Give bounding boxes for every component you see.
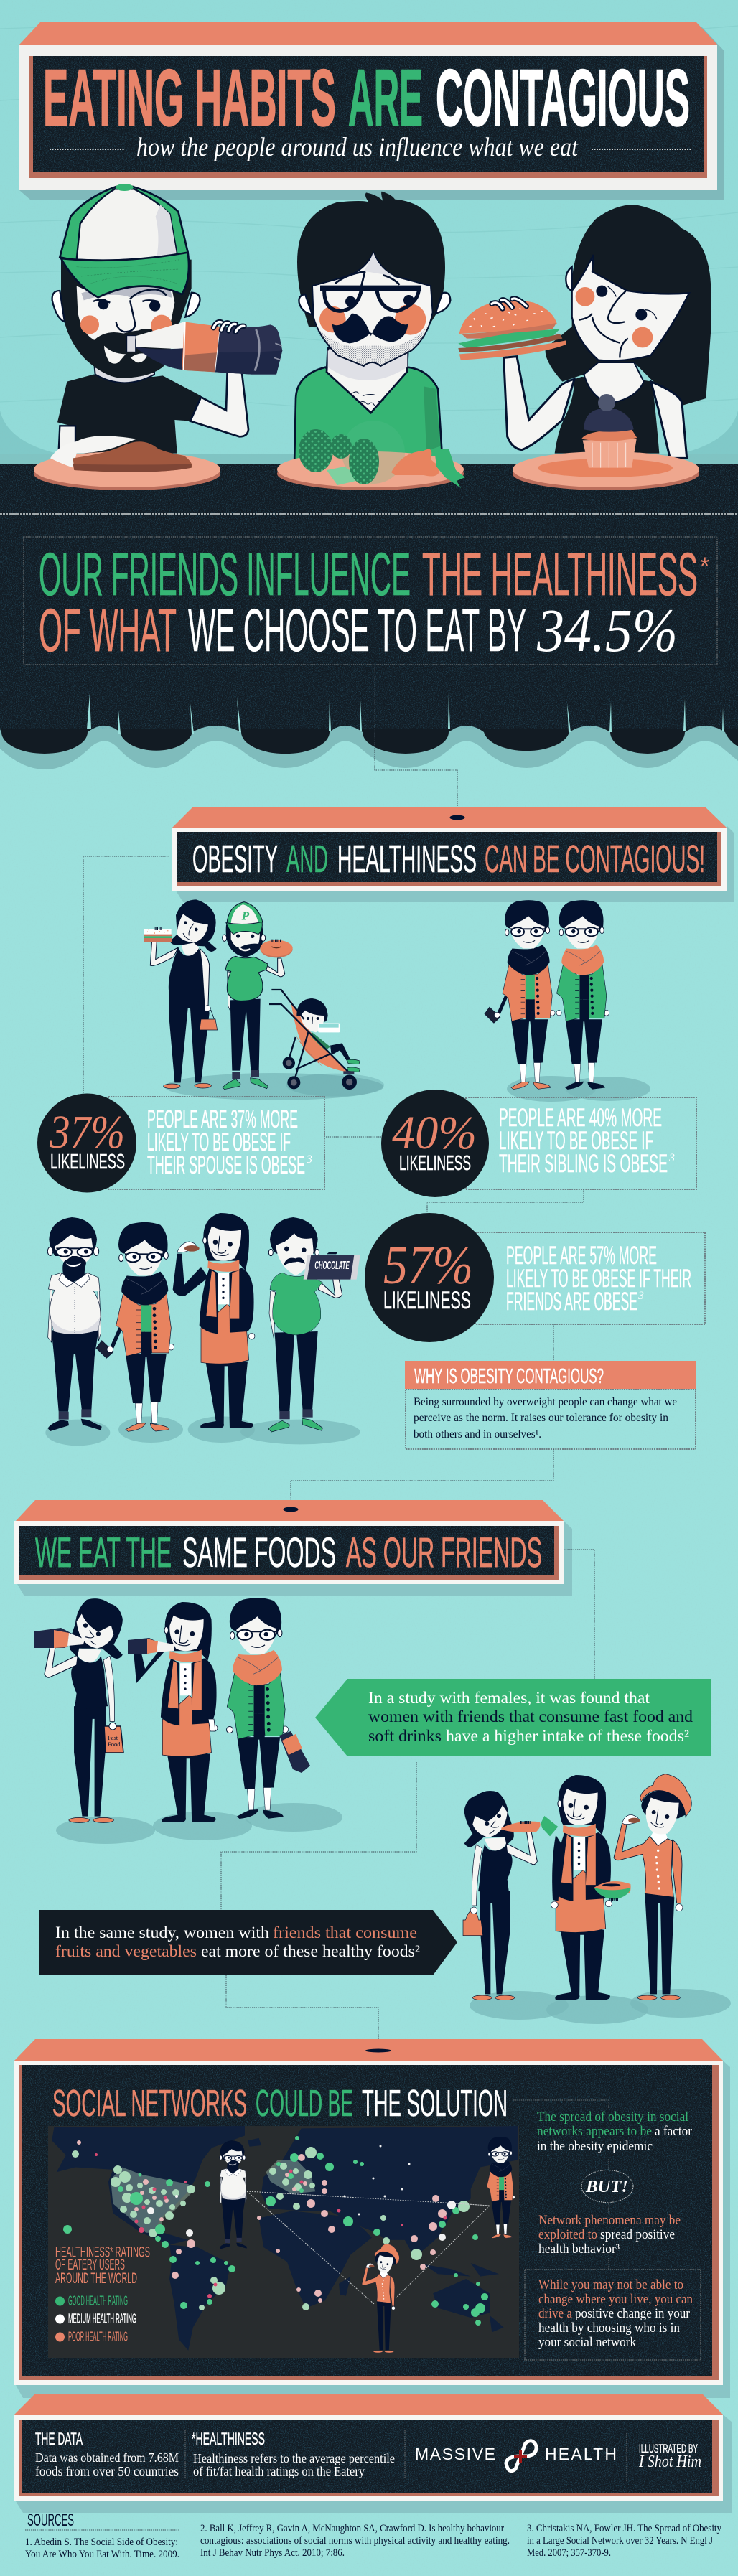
section header: we eat the same foods: WE EAT THE bbox=[35, 1530, 172, 1576]
map legend: POOR HEALTH RATING bbox=[68, 2330, 128, 2344]
social callout box: change where you live, you can bbox=[538, 2292, 693, 2307]
headline panel: friends influence: 34.5% bbox=[536, 596, 678, 665]
callout: dark study bbox=[39, 1910, 457, 1975]
sources: SOURCES bbox=[27, 2511, 74, 2530]
connector to social panel bbox=[226, 1975, 378, 2051]
the data: THE DATA bbox=[35, 2430, 83, 2449]
callout: green study: women with friends that consume fast food and bbox=[368, 1708, 693, 1725]
panel heading: COULD BE bbox=[256, 2083, 353, 2125]
plate: broccoli and carrots bbox=[277, 421, 465, 490]
stat: 57 percent: LIKELINESS bbox=[383, 1287, 471, 1314]
stat: 57 percent: 57% bbox=[383, 1235, 473, 1296]
illustration: women with carrot, papaya and cookie bbox=[463, 1774, 731, 2024]
stat: 40 percent: 3 bbox=[668, 1152, 675, 1164]
callout: green study: In a study with females, it was found that bbox=[368, 1689, 650, 1707]
chocolate bar: CHOCOLATE bbox=[314, 1260, 350, 1272]
map person: bearded man bbox=[220, 2140, 247, 2249]
map legend: OF EATERY USERS bbox=[55, 2257, 125, 2273]
social side text and connectors: networks appears to be bbox=[537, 2124, 652, 2139]
sources: Med. 2007; 357-370-9. bbox=[527, 2547, 611, 2559]
callout: green study bbox=[315, 1679, 711, 1756]
plate: steak and potatoes bbox=[34, 436, 220, 490]
connector to 37 percent bbox=[83, 856, 169, 1093]
the data: foods from over 50 countries bbox=[35, 2464, 179, 2478]
illustrator credit: ILLUSTRATED BY bbox=[639, 2442, 698, 2455]
footer panel bbox=[14, 2394, 732, 2513]
illustration: siblings bbox=[485, 900, 650, 1102]
soda bottle bbox=[127, 322, 282, 375]
father bbox=[223, 902, 293, 1090]
connector to 57 percent bbox=[427, 1189, 584, 1213]
social side text and connectors bbox=[513, 2100, 693, 2270]
healthiness definition: *HEALTHINESS bbox=[192, 2430, 265, 2449]
woman with carrot bbox=[463, 1791, 558, 2000]
panel: why is obesity contagious: both others and in ourselves¹. bbox=[414, 1428, 541, 1441]
map legend bbox=[55, 2244, 150, 2344]
father: P bbox=[241, 909, 250, 923]
illustration: family with stroller bbox=[144, 899, 384, 1100]
the data bbox=[35, 2430, 179, 2478]
social callout box bbox=[525, 2270, 701, 2360]
social side text and connectors: spread positive bbox=[600, 2227, 675, 2242]
panel heading: SOCIAL NETWORKS bbox=[52, 2083, 247, 2125]
stat: 40 percent: LIKELINESS bbox=[399, 1152, 471, 1175]
papaya bbox=[594, 1881, 631, 1900]
sources: Int J Behav Nutr Phys Act. 2010; 7:86. bbox=[200, 2547, 345, 2559]
healthiness definition: of fit/fat health ratings on the Eatery bbox=[193, 2464, 365, 2478]
callout: dark study: eat more of these healthy foods² bbox=[201, 1942, 420, 1960]
map person: woman bbox=[487, 2137, 515, 2238]
stat: 37 percent: LIKELINESS bbox=[50, 1151, 125, 1174]
connector to obesity header bbox=[375, 665, 457, 818]
section header: obesity and healthiness: AND bbox=[286, 838, 328, 881]
woman three with soda bbox=[227, 1598, 310, 1819]
the data: Data was obtained from 7.68M bbox=[35, 2450, 179, 2465]
panel: why is obesity contagious: WHY IS OBESITY CONTAGIOUS? bbox=[414, 1365, 604, 1388]
stat: 40 percent bbox=[381, 1090, 696, 1197]
header: eating habits are contagious bbox=[19, 22, 724, 200]
stat: 37 percent: PEOPLE ARE 37% MORE bbox=[147, 1105, 298, 1133]
connector to dark callout bbox=[221, 1762, 416, 1910]
stat: 37 percent bbox=[37, 1094, 324, 1193]
illustration: man drinking soda bbox=[52, 184, 282, 454]
plate: cupcake bbox=[513, 394, 699, 490]
illustration: four friends bbox=[45, 1213, 360, 1446]
headline panel: friends influence: OF WHAT bbox=[39, 596, 177, 664]
mother bbox=[144, 899, 218, 1089]
connector to why box bbox=[553, 1324, 554, 1361]
connector to same foods header bbox=[291, 1449, 554, 1509]
social callout box: health by choosing who is in bbox=[538, 2320, 680, 2336]
woman one with soda and fast food bag: Fast bbox=[108, 1734, 118, 1741]
stat: 37 percent: THEIR SPOUSE IS OBESE bbox=[147, 1151, 305, 1179]
sources: in a Large Social Network over 32 Years. N Engl J bbox=[527, 2535, 713, 2547]
illustrator credit: I Shot Him bbox=[638, 2453, 701, 2471]
stat: 37 percent: 37% bbox=[49, 1106, 125, 1158]
illustration: man with glasses and moustache bbox=[294, 192, 450, 465]
social side text and connectors: Network phenomena may be bbox=[538, 2213, 681, 2228]
callout: dark study: friends that consume bbox=[273, 1924, 417, 1942]
sources: You Are Who You Eat With. Time. 2009. bbox=[25, 2549, 179, 2560]
title: EATING HABITS bbox=[43, 53, 336, 143]
panel: why is obesity contagious: perceive as the norm. It raises our tolerance for obesity in bbox=[414, 1412, 668, 1424]
callout: green study: soft drinks bbox=[368, 1727, 442, 1745]
callout: dark study: In the same study, women with bbox=[55, 1924, 270, 1942]
section header: we eat the same foods: AS OUR FRIENDS bbox=[346, 1530, 542, 1576]
panel: social networks could be the solution bbox=[14, 2039, 730, 2398]
social side text and connectors: a factor bbox=[655, 2124, 693, 2139]
social side text and connectors: health behavior³ bbox=[538, 2242, 620, 2257]
massive health logo: MASSIVE bbox=[415, 2445, 495, 2463]
healthiness definition bbox=[192, 2430, 395, 2478]
illustrator credit bbox=[638, 2442, 701, 2471]
massive health logo bbox=[415, 2441, 617, 2471]
illustration: women with soda and fast food bbox=[34, 1598, 342, 1844]
table bbox=[0, 464, 738, 769]
social callout box: positive change in your bbox=[575, 2306, 691, 2321]
sources bbox=[25, 2511, 722, 2560]
map legend: AROUND THE WORLD bbox=[55, 2270, 137, 2287]
title: ARE bbox=[348, 53, 423, 143]
stat: 57 percent: 3 bbox=[637, 1290, 644, 1302]
map legend: HEALTHINESS* RATINGS bbox=[55, 2244, 150, 2261]
map person: hat man bbox=[362, 2244, 399, 2353]
panel: why is obesity contagious bbox=[405, 1361, 696, 1449]
panel: why is obesity contagious: Being surrounded by overweight people can change what we bbox=[414, 1396, 677, 1408]
burger bbox=[458, 299, 566, 360]
sources: contagious: associations of social norms with physical activity and healthy eating. bbox=[200, 2535, 510, 2547]
subtitle: how the people around us influence what we eat bbox=[136, 133, 579, 162]
social side text and connectors: BUT! bbox=[585, 2178, 628, 2196]
callout: dark study: fruits and vegetables bbox=[55, 1942, 197, 1960]
social callout box: While you may not be able to bbox=[538, 2277, 683, 2292]
map legend: GOOD HEALTH RATING bbox=[68, 2294, 128, 2308]
connector between stats bbox=[326, 1136, 381, 1138]
woman with papaya bbox=[551, 1775, 612, 2000]
sources: 2. Ball K, Jeffrey R, Gavin A, McNaughton SA, Crawford D. Is healthy behaviour bbox=[200, 2523, 504, 2534]
chocolate bar bbox=[304, 1252, 360, 1280]
social callout box: drive a bbox=[538, 2306, 572, 2321]
section header: we eat the same foods bbox=[14, 1500, 572, 1596]
social side text and connectors: in the obesity epidemic bbox=[537, 2139, 653, 2154]
section header: obesity and healthiness: OBESITY bbox=[192, 838, 278, 881]
massive health logo: HEALTH bbox=[545, 2445, 617, 2463]
connector to green callout bbox=[564, 1550, 594, 1679]
panel heading: THE SOLUTION bbox=[362, 2083, 508, 2125]
healthiness definition: Healthiness refers to the average percentile bbox=[193, 2451, 395, 2465]
stat: 37 percent: LIKELY TO BE OBESE IF bbox=[147, 1128, 291, 1156]
illustration: woman with burger and cupcake bbox=[458, 205, 711, 458]
map legend: MEDIUM HEALTH RATING bbox=[68, 2311, 136, 2326]
callout: green study: have a higher intake of these foods² bbox=[446, 1727, 689, 1745]
headline panel: friends influence bbox=[24, 537, 717, 665]
network triangle bbox=[247, 2191, 490, 2304]
section header: obesity and healthiness: HEALTHINESS bbox=[337, 838, 477, 881]
woman one with soda and fast food bag bbox=[34, 1598, 123, 1823]
woman two with soda bbox=[128, 1602, 218, 1822]
headline panel: friends influence: * bbox=[700, 553, 709, 580]
woman one with soda and fast food bag: Food bbox=[108, 1741, 121, 1748]
social callout box: your social network bbox=[538, 2335, 636, 2350]
section header: we eat the same foods: SAME FOODS bbox=[182, 1530, 336, 1576]
social side text and connectors: The spread of obesity in social bbox=[537, 2109, 688, 2125]
section header: obesity and healthiness bbox=[172, 807, 734, 902]
cap bbox=[60, 184, 189, 297]
stat: 37 percent: 3 bbox=[306, 1153, 312, 1166]
world map bbox=[48, 2126, 519, 2358]
stroller with baby bbox=[269, 990, 360, 1090]
sources: 1. Abedin S. The Social Side of Obesity: bbox=[25, 2537, 178, 2548]
social side text and connectors: exploited to bbox=[538, 2227, 597, 2242]
hat man bbox=[614, 1774, 691, 2000]
stat: 40 percent: 40% bbox=[392, 1107, 477, 1159]
stat: 57 percent bbox=[365, 1213, 705, 1342]
